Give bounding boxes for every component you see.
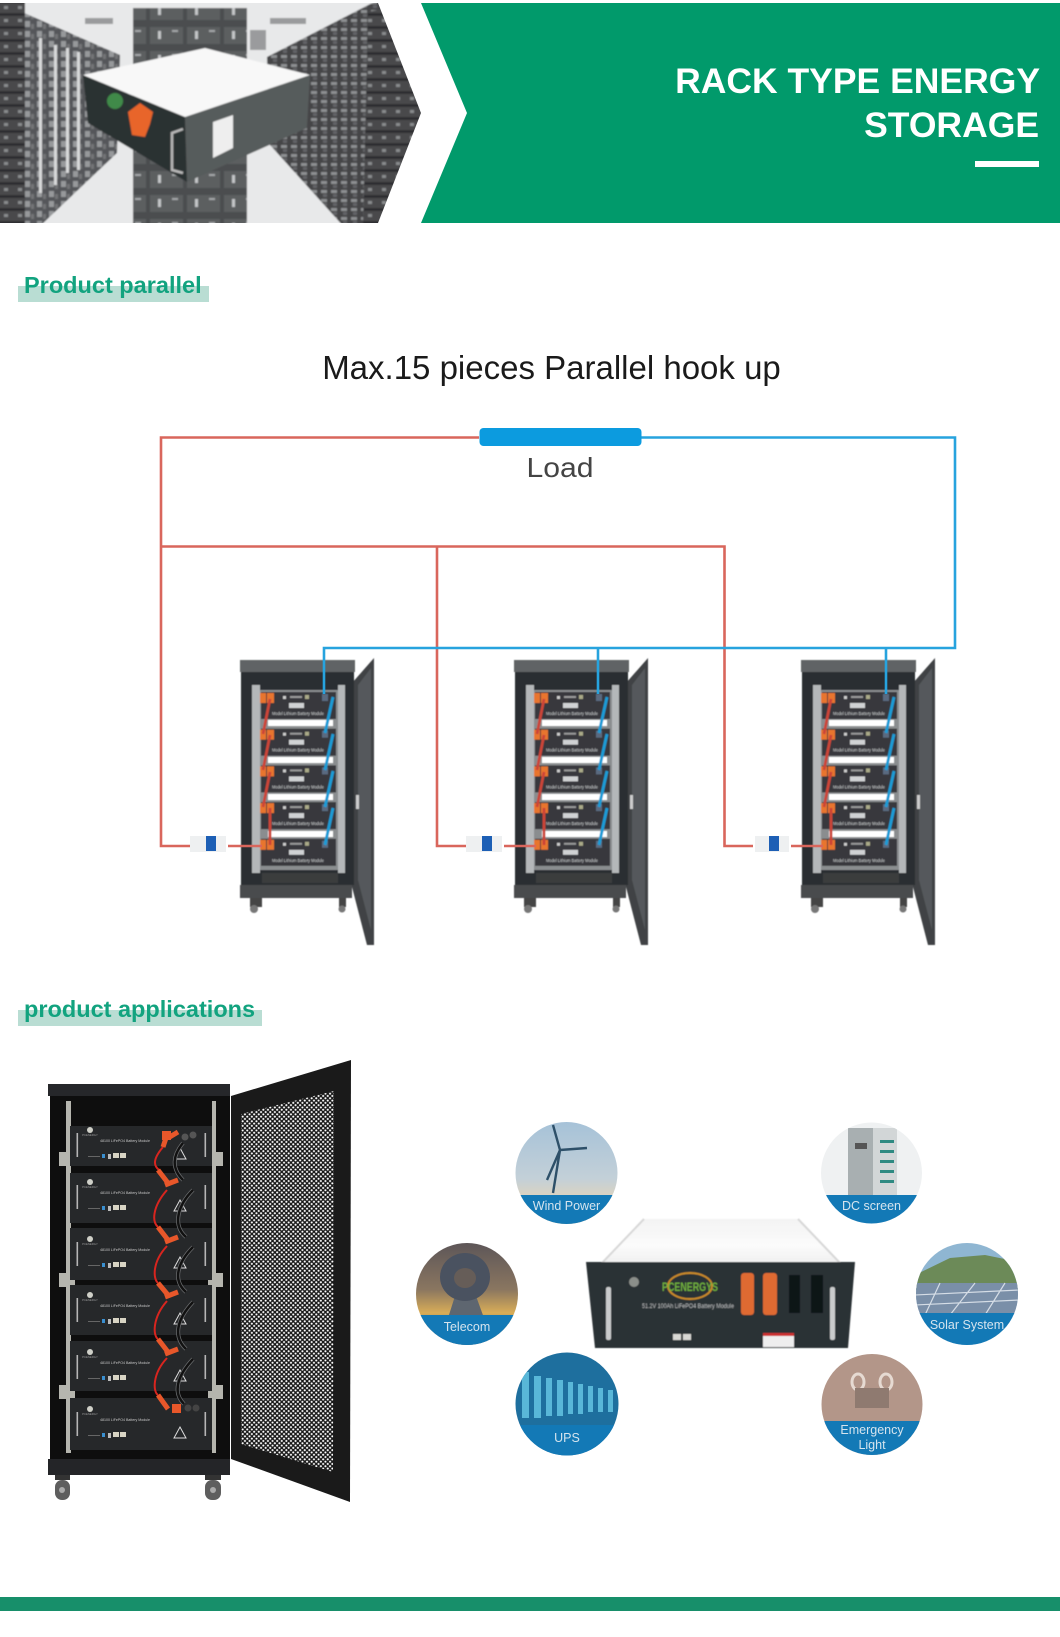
application: Wind Power: Wind Power xyxy=(533,1199,600,1213)
application: Wind Power xyxy=(515,1122,619,1225)
ports xyxy=(673,1334,691,1340)
parallel wiring diagram xyxy=(161,428,955,945)
header photo: battery in server room xyxy=(0,0,425,228)
application: UPS xyxy=(515,1352,619,1456)
application: Telecom: Telecom xyxy=(444,1320,490,1334)
application: Emergency Light: Emergency xyxy=(840,1423,904,1437)
terminals xyxy=(162,1131,200,1413)
rack 2 xyxy=(514,658,648,945)
battery module 3 xyxy=(70,1228,212,1280)
battery module 2 xyxy=(70,1173,212,1223)
breaker 1 xyxy=(190,836,226,852)
battery module 1 xyxy=(70,1126,212,1166)
brand logo xyxy=(662,1273,718,1299)
load bar xyxy=(480,428,642,446)
application: DC screen xyxy=(821,1122,923,1225)
background centre rack xyxy=(133,8,247,228)
header green banner xyxy=(421,3,1060,223)
brand logo: PCENERGYS xyxy=(662,1280,718,1294)
application: Emergency Light: Light xyxy=(858,1438,886,1452)
header title xyxy=(675,61,1040,145)
heading: product applications: product applications xyxy=(24,996,255,1022)
application: Telecom xyxy=(416,1243,519,1346)
load label: Load xyxy=(526,452,594,483)
blue negative wiring xyxy=(324,438,955,694)
rack 1 xyxy=(240,658,374,945)
orange connectors xyxy=(741,1273,777,1315)
battery side face xyxy=(185,75,310,182)
battery module 5 xyxy=(70,1341,212,1391)
application: Emergency Light xyxy=(821,1354,923,1456)
black cables xyxy=(175,1143,193,1404)
header title underline xyxy=(975,161,1039,167)
breaker 3 xyxy=(755,836,789,852)
warning label xyxy=(763,1333,794,1347)
battery dark front face xyxy=(83,75,187,182)
heading: product parallel: Product parallel xyxy=(24,272,202,298)
ceiling detail xyxy=(85,18,306,50)
application: UPS: UPS xyxy=(554,1431,580,1445)
orange plugs xyxy=(158,1132,178,1409)
battery module 4 xyxy=(70,1285,212,1335)
rails xyxy=(59,1101,223,1453)
application: Solar System: Solar System xyxy=(930,1318,1004,1332)
battery white top xyxy=(83,48,310,117)
battery module 6 xyxy=(70,1398,212,1450)
centre battery module xyxy=(586,1219,855,1348)
red positive wiring xyxy=(161,438,823,846)
subtitle: parallel hook up: Max.15 pieces Parallel hook up xyxy=(322,349,781,386)
application: Solar System xyxy=(915,1243,1019,1346)
header title: STORAGE xyxy=(864,105,1039,145)
casters xyxy=(55,1475,221,1500)
cabinet body xyxy=(50,1090,230,1460)
rack 3 xyxy=(801,658,935,945)
cabinet door xyxy=(231,1060,351,1502)
header title: RACK TYPE ENERGY xyxy=(675,61,1040,101)
application: DC screen: DC screen xyxy=(842,1199,901,1213)
large battery cabinet with open door xyxy=(48,1060,351,1502)
footer bar xyxy=(0,1597,1060,1611)
black connectors xyxy=(789,1275,823,1313)
red cables xyxy=(154,1147,167,1395)
breaker 2 xyxy=(466,836,502,852)
centre battery module: 51.2V 100Ah LiFePO4 Battery Module xyxy=(642,1303,734,1310)
